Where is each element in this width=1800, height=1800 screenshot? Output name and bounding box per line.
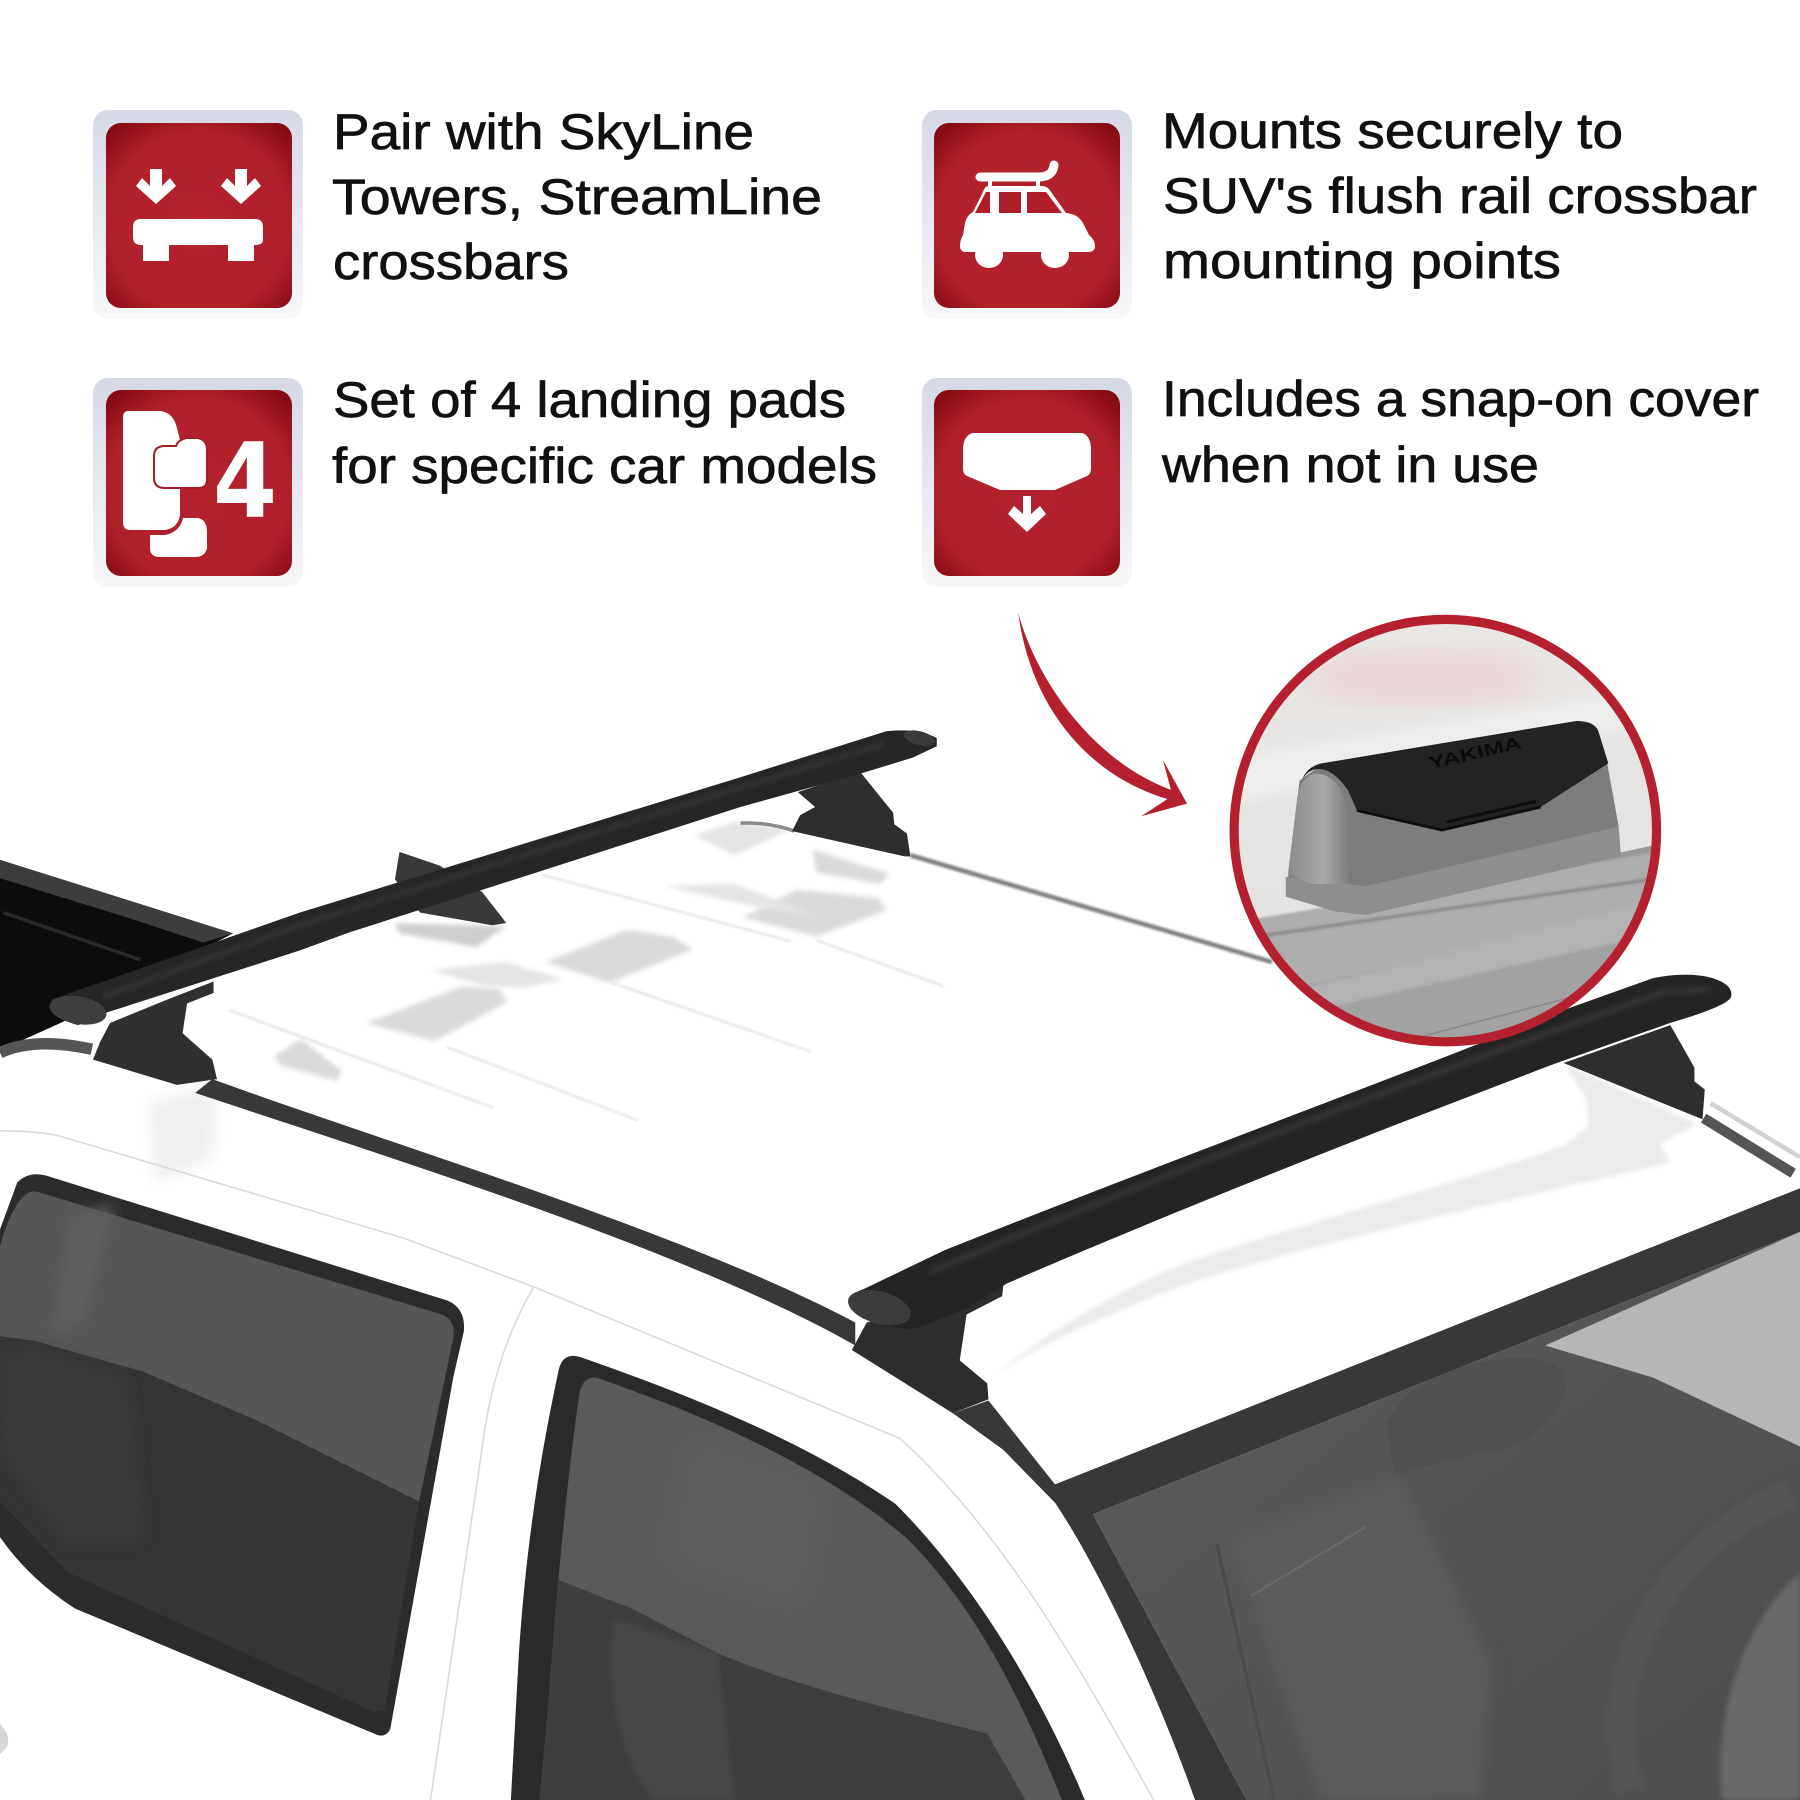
text: cover xyxy=(1161,371,1759,493)
side rail near the rear xyxy=(0,1044,92,1053)
door handle xyxy=(0,1724,8,1754)
feature: crossbar compatibility xyxy=(93,104,822,319)
text: mounting: SUV's flush rail crossbar xyxy=(1163,168,1757,224)
text: mounting: mounting points xyxy=(1163,233,1561,289)
pad body xyxy=(1288,763,1619,886)
icon: pads with number 4: 4 xyxy=(213,422,277,542)
side roof rail xyxy=(195,1079,855,1345)
text: compatibility: Towers, StreamLine xyxy=(332,169,822,225)
inset photo xyxy=(1238,624,1652,1038)
text: compatibility: Pair with SkyLine xyxy=(333,104,754,160)
windshield glass and interior xyxy=(1093,1232,1800,1800)
text: set of 4: for specific car models xyxy=(332,438,877,494)
faint roof lines xyxy=(230,875,944,1120)
cover lip xyxy=(1357,801,1541,830)
text: set of 4 xyxy=(332,372,877,494)
rear crossbar right foot xyxy=(792,771,910,856)
body seams xyxy=(0,1131,1154,1800)
text: cover: Includes a snap-on cover xyxy=(1162,371,1759,427)
inset circle: snap-on cover close-up xyxy=(1228,614,1665,1056)
text: set of 4: Set of 4 landing pads xyxy=(333,372,846,428)
rear side window xyxy=(0,1174,464,1736)
pad plinth xyxy=(1286,827,1621,915)
rail arc behind the rear right foot xyxy=(740,823,794,831)
front side window xyxy=(511,1356,1085,1800)
feature: secure mounting xyxy=(922,103,1757,319)
rear crossbar xyxy=(47,728,937,1029)
icon: car with roof load xyxy=(922,110,1132,319)
far roof rail xyxy=(910,855,1272,962)
text: mounting xyxy=(1162,103,1757,289)
snap-on cover xyxy=(1302,721,1608,830)
pad end tower xyxy=(1288,774,1344,884)
front crossbar xyxy=(844,975,1731,1331)
feature: set of 4 pads xyxy=(93,372,877,587)
text: compatibility xyxy=(332,104,822,290)
far side rail at right xyxy=(1704,1103,1800,1173)
arrow pointing to inset xyxy=(1018,613,1187,816)
windshield frame xyxy=(953,1188,1800,1800)
truck bed behind the cab xyxy=(0,860,233,1050)
cover logo: YAKIMA xyxy=(1427,732,1523,773)
text: compatibility: crossbars xyxy=(333,234,569,290)
feature: snap-on cover xyxy=(922,371,1759,587)
icon: cover with down arrow xyxy=(922,378,1132,587)
car photo: white SUV roof with crossbars xyxy=(0,728,1800,1800)
text: mounting: Mounts securely to xyxy=(1162,103,1623,159)
roof reflections xyxy=(149,822,890,1182)
inset ring xyxy=(1234,619,1657,1042)
front roof crease shading xyxy=(992,1063,1697,1378)
icon: pad with down arrows xyxy=(93,110,303,319)
text: cover: when not in use xyxy=(1161,437,1539,493)
front crossbar left foot xyxy=(852,1285,1003,1413)
rear crossbar left foot xyxy=(93,982,217,1085)
shark fin antenna xyxy=(395,852,506,925)
icon: pads with number 4 xyxy=(93,378,303,587)
front crossbar right foot xyxy=(1564,1025,1705,1119)
